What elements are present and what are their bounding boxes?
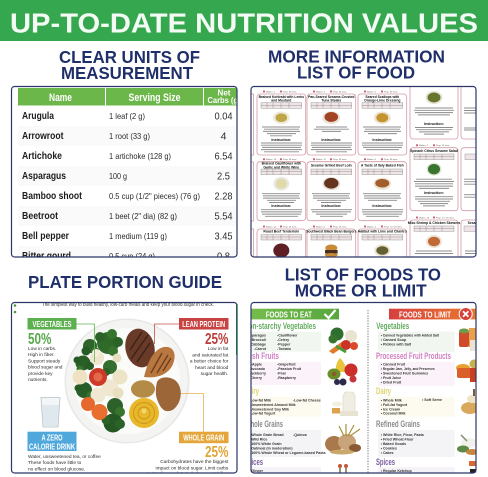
callout: zero calorie drink: A ZERO — [42, 432, 63, 442]
intro line: The simplest way to build healthy, low-carb meals and keep your blood sugar in check. — [42, 302, 214, 308]
recipe card: miso shrimp and chicken skewers: Makes: 10 — [419, 217, 430, 219]
limit: dairy: • Coconut Milk — [381, 412, 406, 416]
limit: refined grains — [376, 419, 455, 457]
recipe card: seared scallops: Prep: 30 mins — [384, 90, 398, 93]
recipe card: pan-seared sesame crusted tuna: Pan-Seared Sesame-Crusted — [308, 95, 354, 99]
callout: whole grain: Carbohydrates have the biggest — [160, 459, 229, 465]
icon: processed fruit — [456, 360, 478, 382]
eat: whole grains: Whole Grains — [245, 419, 283, 429]
limit: spices: • Regular Ketchup — [381, 469, 413, 473]
banner: foods to limit — [389, 308, 477, 320]
limit: dairy: • Whole Milk — [381, 399, 402, 403]
recipe card: braised kohlrabi: Prep: 30 mins — [283, 90, 297, 93]
nutrition table: 3.45 — [214, 230, 233, 242]
recipe card: braised cauliflower: Braised Cauliflower with — [262, 162, 301, 166]
eat: whole grains: -100% Whole Wheat or Legume-based Pasta — [250, 451, 326, 455]
nutrition table: Net — [218, 88, 231, 98]
recipe card: pan-seared sesame crusted tuna: Tuna Steaks — [321, 99, 341, 103]
eat: fresh fruits: -Cherry — [249, 376, 262, 380]
icon: vegetables — [328, 328, 358, 354]
heading: list of foods — [285, 265, 441, 301]
recipe card: sesame grilled beef loin: Makes: 11 — [316, 159, 327, 161]
recipe card: braised kohlrabi — [257, 90, 306, 155]
limit: processed fruit products: • Regular Jam, Jelly, and Preserves — [381, 367, 435, 371]
plate illustration — [64, 318, 190, 444]
recipe card: braised kohlrabi: Makes: 4 — [266, 91, 276, 93]
limit: refined grains: • Baked Goods — [381, 442, 406, 446]
recipe card: spinach citrus sesame salad: Instruction: — [424, 191, 444, 195]
callout: lean protein — [154, 318, 229, 377]
recipe card: roast beef tenderloin: Prep: 45 mins — [283, 225, 297, 228]
limit: vegetables: Vegetables — [376, 321, 409, 331]
nutrition table: 100 g — [109, 171, 127, 181]
callout: vegetables: VEGETABLES — [32, 319, 72, 329]
limit: dairy: Dairy — [376, 386, 391, 396]
callout: zero calorie drink: These foods have little to — [28, 460, 82, 466]
recipe card: halibut with lime and cilantro: Halibut with Lime and Cilantro — [358, 230, 407, 234]
nutrition table: Bell pepper — [22, 230, 69, 242]
nutrition table: Name — [49, 92, 72, 104]
limit: processed fruit products: Processed Fruit Products — [376, 351, 451, 361]
recipe card: halibut with lime and cilantro: Prep: 1 hr 25 mins — [384, 225, 403, 228]
nutrition table: Beetroot — [22, 210, 58, 222]
eat: dairy: -Unsweetened Soy Milk — [249, 408, 289, 412]
icon: refined grains — [457, 435, 478, 455]
recipe card: braised cauliflower: Garlic and White Wine — [263, 165, 299, 169]
callout: vegetables: 50% — [28, 331, 52, 348]
recipe card: miso shrimp and chicken skewers — [408, 216, 460, 256]
limit: spices: Spices — [376, 457, 395, 467]
recipe card: pan-seared sesame crusted tuna — [307, 90, 356, 155]
icon: water glass — [41, 398, 60, 427]
callout: whole grain: impact on blood sugar. Limit carbs — [156, 465, 229, 471]
eat: fresh fruits: -Blackberry — [246, 372, 266, 376]
recipe card: seared scallops: Orange-Lime Dressing — [364, 99, 400, 103]
recipe card: southwest black bean burgers: Southwest Black Bean Burgers — [306, 230, 357, 234]
nutrition table: 0.5 cup (1/2" pieces) (76 g) — [109, 191, 200, 201]
eat: dairy: -Unsweetened Almond Milk — [249, 403, 296, 407]
callout: whole grain: to ¼ of your plate to help you stabilize — [148, 471, 229, 477]
eat: dairy — [252, 388, 321, 416]
recipe card: pan-seared sesame crusted tuna: Makes: 4 — [316, 91, 326, 93]
callout: lean protein: 25% — [205, 331, 228, 348]
broccoli and vegetables — [72, 329, 128, 432]
nutrition table — [18, 88, 241, 262]
nutrition table: Arrowroot — [22, 130, 64, 142]
recipe card: braised cauliflower: Instruction: — [271, 204, 291, 208]
recipe card: seared scallops: Seared Scallops with — [365, 95, 399, 99]
eat: non-starchy vegetables: -Carrot — [254, 347, 267, 351]
heading: plate portion guide: PLATE PORTION GUIDE — [28, 272, 222, 292]
limit: refined grains: • Cookies — [381, 446, 397, 450]
recipe card: braised cauliflower: Makes: 10 — [266, 159, 277, 161]
eat: fresh fruits — [252, 352, 321, 385]
recipe card: roast beef tenderloin: Roast Beef Tenderloin — [263, 230, 299, 234]
icon: dairy — [332, 392, 358, 416]
callout: vegetables: Support steady — [28, 358, 61, 364]
limit: vegetables: • Pickles with Salt — [381, 342, 412, 346]
nutrition table: Artichoke — [22, 150, 62, 162]
nutrition table: 0.5 cup (24 g) — [109, 251, 155, 261]
limit: dairy — [376, 386, 455, 417]
limit: dairy: • Full-fat Yogurt — [381, 403, 408, 407]
recipe card: halibut with lime and cilantro — [358, 225, 408, 256]
nutrition table: Arugula — [22, 110, 54, 122]
eat: fresh fruits: -Raspberry — [277, 376, 296, 380]
panel: more information list of food — [250, 50, 477, 258]
limit: refined grains: Refined Grains — [376, 419, 420, 429]
panel: plate portion guide — [12, 272, 237, 477]
eat: non-starchy vegetables: -Celery — [277, 338, 289, 342]
recipe card: braised kohlrabi: Braised Kohlrabi with Leeks — [259, 95, 304, 99]
recipe card: pan-seared sesame crusted tuna: Prep: 30 mins — [333, 90, 347, 93]
recipe card: partial right column — [460, 147, 476, 212]
recipe card: salad continued — [410, 80, 458, 139]
recipe card: salad continued: Instruction: — [424, 122, 444, 126]
nutrition table: 0.8 — [217, 250, 230, 262]
recipe card: roast beef tenderloin: Makes: 10 — [266, 226, 277, 228]
eat: dairy: -Low-fat Milk — [249, 399, 271, 403]
eat: fresh fruits: -Grapefruit — [277, 363, 296, 367]
recipe card: seared scallops: Instruction: — [372, 138, 392, 142]
callout: vegetables: nutrients. — [28, 377, 48, 383]
recipe card: sesame partial: Sesame — [468, 221, 481, 225]
recipe card: braised kohlrabi: Instruction: — [271, 138, 291, 142]
recipe card: a taste of italy baked fish: A Taste of Italy Baked Fish — [361, 163, 404, 167]
recipe card: braised cauliflower — [257, 158, 306, 221]
eat: fresh fruits: -Passion Fruit — [277, 367, 302, 371]
recipe card: a taste of italy baked fish — [358, 158, 407, 221]
recipe card: a taste of italy baked fish: Instruction: — [372, 204, 392, 208]
recipe card: sesame grilled beef loin: Instruction: — [321, 204, 341, 208]
recipe card: miso shrimp and chicken skewers: Prep: 1 hr 25 mins — [436, 216, 455, 219]
eat: whole grains: -Quinoa — [293, 433, 308, 437]
callout: lean protein: LEAN PROTEIN — [182, 319, 225, 329]
nutrition table: 6.54 — [214, 150, 233, 162]
nutrition table: Bamboo shoot — [22, 190, 82, 202]
nutrition table: 1 medium (119 g) — [109, 231, 167, 241]
recipe card: spinach citrus sesame salad: Spinach Citrus Sesame Salad — [410, 149, 458, 153]
recipe card: miso shrimp and chicken skewers: Miso Shrimp & Chicken Skewers — [408, 221, 460, 225]
nutrition table: 4 — [221, 130, 227, 142]
icon: fruits — [328, 358, 358, 386]
eat: fresh fruits: Fresh Fruits — [242, 351, 279, 361]
callout: zero calorie drink: CALORIE DRINK — [29, 441, 76, 451]
limit: processed fruit products: • Sweetened Fruit Gummies — [381, 372, 428, 376]
eat: non-starchy vegetables: Non-starchy Vegetables — [244, 321, 316, 331]
limit: processed fruit products: • Dried Fruit — [381, 380, 402, 384]
nutrition table: Serving Size — [128, 92, 180, 104]
title banner — [0, 0, 488, 41]
heading: more information: MORE INFORMATION — [268, 46, 445, 66]
nutrition table: 2.28 — [214, 190, 233, 202]
recipe card: a taste of italy baked fish: Makes: 4 — [367, 159, 377, 161]
eat: whole grains: -100% White Grain — [250, 442, 282, 446]
heading: list of foods: LIST OF FOODS TO — [285, 265, 441, 285]
banner: foods to eat — [251, 309, 339, 319]
eat: whole grains: -Wild Rice — [250, 437, 267, 441]
icon: ketchup — [469, 461, 477, 473]
limit: refined grains: • Fried Wheat Flour — [381, 437, 414, 441]
eat: spices — [252, 458, 321, 472]
nutrition table: Bitter gourd — [22, 250, 71, 262]
recipe card: sesame grilled beef loin: Sesame Grilled Beef Loin — [311, 163, 352, 167]
eat: non-starchy vegetables: -Cabbage — [250, 342, 266, 346]
eat: dairy: -Low-fat Cheese — [293, 399, 321, 403]
eat: whole grains — [252, 420, 326, 457]
icon: spices — [338, 464, 348, 473]
callout: whole grain: 25% — [205, 444, 228, 461]
callout: lean protein: Low in fat — [208, 346, 229, 352]
recipe card: southwest black bean burgers: Makes: 6 — [316, 226, 326, 228]
callout: vegetables: blood sugar and — [28, 365, 63, 371]
limit: processed fruit products: • Canned Fruit — [381, 363, 406, 367]
heading: more information: LIST OF FOOD — [297, 62, 415, 82]
icon: grains — [325, 424, 361, 454]
callout: whole grain: WHOLE GRAIN — [183, 433, 224, 443]
callout: lean protein: a better choice for — [190, 359, 229, 365]
callout: vegetables: Low in carbs. — [28, 346, 56, 352]
recipe card: sesame partial — [460, 220, 476, 256]
limit: dairy: • Soft Serve — [422, 398, 442, 402]
heading: clear units — [59, 47, 200, 83]
eat: whole grains: -Whole Grain Bread — [250, 433, 284, 437]
recipe card: braised cauliflower: Prep: 35 mins — [283, 158, 297, 161]
nutrition table: 1 root (33 g) — [109, 131, 150, 141]
callout: vegetables — [28, 318, 94, 383]
recipe card: a taste of italy baked fish: Prep: 30 mins — [384, 158, 398, 161]
recipe card: pan-seared sesame crusted tuna: Instruction: — [321, 138, 341, 142]
nutrition table: 0.04 — [214, 110, 233, 122]
eat: spices: Spices — [244, 457, 263, 467]
nutrition table: 1 beet (2" dia) (82 g) — [109, 211, 177, 221]
recipe cards — [252, 87, 476, 256]
recipe card: seared scallops: Makes: 4 — [367, 91, 377, 93]
heading: clear units: CLEAR UNITS OF — [59, 47, 200, 67]
icon: canned vegetables — [459, 328, 477, 351]
recipe card: braised kohlrabi: and Mustard — [271, 99, 291, 103]
eat: dairy: Dairy — [244, 386, 259, 396]
limit: refined grains: • Cakes — [381, 451, 394, 455]
callout: zero calorie drink — [28, 432, 101, 472]
callout: zero calorie drink: no effect on blood glucose. — [28, 466, 85, 472]
steak and chicken — [122, 326, 175, 377]
eat: non-starchy vegetables: -Asparagus — [246, 334, 266, 338]
recipe card: sesame grilled beef loin — [307, 158, 356, 221]
panel: clear units of measurement — [12, 47, 241, 262]
limit: processed fruit products: • Fruit Juice — [381, 376, 401, 380]
eat: non-starchy vegetables: -Pepper — [277, 342, 291, 346]
callout: zero calorie drink: Water, unsweetened tea, or coffee — [28, 454, 101, 460]
limit: vegetables: • Canned Vegetables with Added Salt — [381, 334, 440, 338]
nutrition table: Carbs (g) — [208, 96, 241, 105]
recipe card: southwest black bean burgers — [306, 225, 356, 256]
limit: dairy: • Ice Cream — [381, 408, 400, 412]
heading: clear units: MEASUREMENT — [61, 63, 193, 83]
recipe card: spinach citrus sesame salad — [410, 144, 458, 211]
heading: more information — [268, 46, 445, 82]
nutrition table: 1 leaf (2 g) — [109, 111, 145, 121]
heading: list of foods: MORE OR LIMIT — [295, 281, 427, 301]
callout: lean protein: heart and blood — [195, 365, 229, 371]
eat: non-starchy vegetables: -Broccoli — [250, 338, 266, 342]
limit: vegetables — [376, 321, 455, 352]
recipe card: spinach citrus sesame salad: Makes: 4 — [419, 145, 429, 147]
nutrition table: 5.54 — [214, 210, 233, 222]
limit: processed fruit products — [376, 351, 455, 386]
recipe card: sesame grilled beef loin: Prep: 35 mins — [333, 158, 347, 161]
nutrition table: 2.5 — [217, 170, 230, 182]
icon: rich dairy — [461, 389, 479, 414]
banner: foods to limit: FOODS TO LIMIT — [399, 309, 452, 319]
callout: lean protein: sugar health. — [201, 371, 228, 377]
callout: vegetables: High in fiber. — [28, 352, 55, 358]
callout: lean protein: and saturated fat — [192, 352, 229, 358]
recipe card: roast beef tenderloin — [256, 225, 306, 256]
banner: foods to eat: FOODS TO EAT — [266, 309, 313, 319]
panel: list of foods to more or limit — [242, 265, 479, 475]
nutrition table: 1 artichoke (128 g) — [109, 151, 171, 161]
recipe card: seared scallops — [358, 90, 407, 155]
eat: dairy: -Low-fat Yogurt — [249, 412, 276, 416]
eat: fresh fruits: -Avocado — [249, 367, 266, 371]
eat: fresh fruits: -Apple — [251, 363, 262, 367]
limit: refined grains: • White Rice, Flour, Pasta — [381, 433, 425, 437]
recipe card: southwest black bean burgers: Prep: 25 mins — [333, 225, 347, 228]
grains and pasta — [129, 377, 181, 428]
title banner: UP-TO-DATE NUTRITION VALUES — [10, 8, 478, 38]
limit: spices — [376, 457, 455, 475]
callout: vegetables: provide key — [28, 371, 53, 377]
eat: whole grains: -Oatmeal (in moderation) — [250, 446, 293, 450]
recipe card: spinach citrus sesame salad: Prep: 25 mins — [436, 144, 450, 147]
eat: non-starchy vegetables — [252, 322, 321, 352]
eat: spices: -Ginger — [250, 469, 264, 473]
eat: non-starchy vegetables: -Cauliflower — [277, 334, 298, 338]
eat: fresh fruits: -Pear — [277, 372, 287, 376]
recipe card: halibut with lime and cilantro: Makes: 4 — [367, 226, 377, 228]
nutrition table: Asparagus — [22, 170, 66, 182]
limit: vegetables: • Canned Soup — [381, 338, 407, 342]
eat: non-starchy vegetables: -Tomato — [277, 347, 292, 351]
callout: whole grain — [148, 394, 229, 477]
